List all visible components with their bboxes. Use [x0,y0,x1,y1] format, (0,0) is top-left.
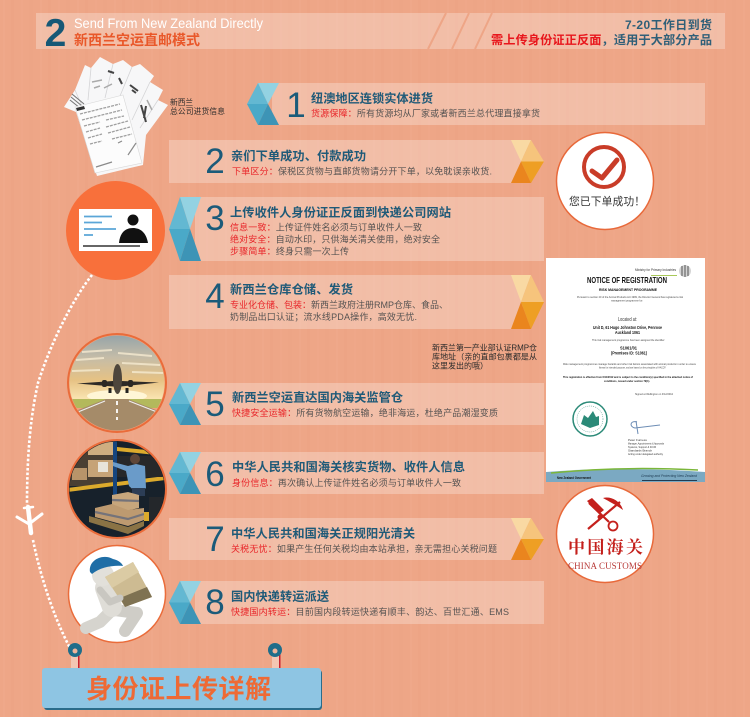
illustration: stack of invoices [64,57,168,176]
pins and hanging cords [68,643,282,669]
certificate: notice of registration: Located at: [618,317,637,323]
certificate: notice of registration: Auckland 1061 [615,330,640,335]
step 5 [169,383,544,425]
certificate: notice of registration: NOTICE OF REGISTRATION [587,275,667,285]
step 4 [169,275,544,329]
dotted flight path [27,275,92,648]
certificate: notice of registration: Growing and Protecting New Zealand [641,473,698,478]
step 1 [247,83,705,125]
certificate: notice of registration: Pursuant to section 20 of the Animal Products Act 1999, the Director General has registered a risk [577,295,683,299]
step 5: 快捷安全运输：所有货物航空运输，绝非海运，杜绝产品潮湿变质 [232,407,498,418]
step 2: 2 [205,142,225,181]
certificate: notice of registration: Standards Branch [628,448,652,452]
header band: 新西兰空运直邮模式 [74,32,200,48]
step 5: 5 [205,385,225,424]
paper caption: 新西兰 [170,97,193,107]
step 3: 绝对安全：自动水印，只供海关清关使用，绝对安全 [230,234,440,244]
RMP note: 新西兰第一产业部认证RMP仓 [432,342,537,352]
step 3 [169,197,544,261]
header band: Send From New Zealand Directly [74,15,263,31]
step 2: 下单区分：保税区货物与直邮货物请分开下单，以免耽误亲收货. [232,166,492,176]
step 6: 6 [205,455,225,494]
certificate: notice of registration: Peter Furness [628,438,647,442]
photo: warehouse inspection [68,440,167,538]
certificate: notice of registration: This risk management programme has been assigned the identifier: [592,338,665,342]
certificate: notice of registration: This registration is effective from 6/11/2012 and is subject to the condition(s) specified in the attached notice of [563,375,693,379]
step 1: 纽澳地区连锁实体进货 [311,90,433,106]
china customs badge [556,486,654,582]
step 3: 上传收件人身份证正反面到快递公司网站 [230,204,451,220]
certificate: notice of registration: Signed at Wellington on 3/12/2012 [635,392,673,396]
step 7: 7 [205,520,225,559]
step 2: 亲们下单成功、付款成功 [231,148,366,163]
step 4: 奶制品出口认证；流水线PDA操作，高效无忧. [230,311,417,322]
certificate: notice of registration: fitness for intended purpose, and are based on the principles of HACCP. [599,366,666,370]
certificate: notice of registration: Unit D, 61 Hugo Johnston Drive, Penrose [593,325,662,330]
step 8: 国内快递转运派送 [231,588,329,604]
step 7: 中华人民共和国海关正规阳光清关 [231,526,415,540]
step 1: 货源保障：所有货源均从厂家或者新西兰总代理直接拿货 [311,108,540,118]
step 6: 身份信息：再次确认上传证件姓名必须与订单收件人一致 [232,477,461,488]
certificate: notice of registration: management programme for: [611,298,643,302]
certificate: notice of registration: S1061/01 [620,346,637,350]
photo: delivery figure [68,546,166,642]
certificate: notice of registration: Systems, Support & ICCM [628,445,656,449]
RMP note [432,342,537,370]
header band: 7-20工作日到货 [625,17,712,32]
step 6: 中华人民共和国海关核实货物、收件人信息 [232,459,465,474]
step 3: 步骤简单：终身只需一次上传 [230,246,349,256]
header number: 2 [45,12,66,55]
step 3: 信息一致：上传证件姓名必须与订单收件人一致 [230,222,422,232]
step 8 [169,581,544,624]
step 6 [169,452,544,494]
check badge: order placed: 您已下单成功！ [569,195,645,208]
step 5: 新西兰空运直达国内海关监管仓 [232,390,403,404]
china customs badge: 中国海关 [568,538,643,557]
step 3: 3 [205,199,225,238]
certificate: notice of registration [546,258,705,482]
certificate: notice of registration: (Premises ID: S1061) [611,350,647,356]
certificate: notice of registration: RISK MANAGEMENT PROGRAMME [599,287,657,292]
id card circle [66,181,165,280]
step 4: 新西兰仓库仓储、发货 [230,282,353,296]
step 4: 专业化仓储、包装：新西兰政府注册RMP仓库、食品、 [230,299,448,310]
RMP note: 库地址（亲的直邮包裹都是从 [432,352,537,362]
step 8: 8 [205,583,225,622]
step 2 [169,140,544,183]
RMP note: 这里发出的哦） [432,360,488,370]
step 1: 1 [286,86,306,125]
icon: airplane [17,507,42,533]
certificate: notice of registration: New Zealand Government [557,476,592,480]
photo: plane on runway [68,334,166,434]
header band: 需上传身份证正反面，适用于大部分产品 [491,32,712,47]
header band [36,12,725,55]
certificate: notice of registration: conditions, issued under section 79(1). [604,379,650,383]
step 7: 关税无忧：如果产生任何关税均由本站承担，亲无需担心关税问题 [231,543,497,554]
paper caption [170,97,225,116]
button: id upload details: 身份证上传详解 [86,674,271,704]
certificate: notice of registration: Manager, Appointments & Approvals [628,442,664,446]
paper caption: 总公司进货信息 [170,106,225,116]
step 4: 4 [205,277,225,316]
step 8: 快捷国内转运：目前国内段转运快递有顺丰、韵达、百世汇通、EMS [231,606,509,617]
china customs badge: CHINA CUSTOMS [568,561,642,571]
check badge: order placed [556,132,654,230]
button: id upload details [42,668,322,710]
step 7 [169,518,544,560]
certificate: notice of registration: Acting under delegated authority [628,452,663,456]
certificate: notice of registration: Ministry for Primary Industries [635,267,676,272]
certificate: notice of registration: Risk management programmes manage hazards and other risk factors associated with animal products in order to ensure [563,362,696,366]
